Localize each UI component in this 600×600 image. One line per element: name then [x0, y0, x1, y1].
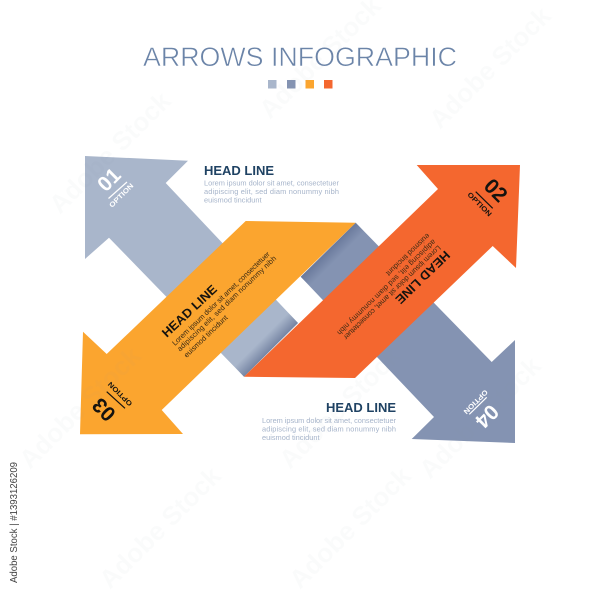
option 03 label: 03	[88, 393, 121, 426]
fold shadow on arrow 01	[222, 300, 298, 377]
arrow 04: dark grey, down-right	[301, 223, 515, 443]
title: ARROWS INFOGRAPHIC	[143, 42, 457, 72]
text block: head line bottom: HEAD LINE	[326, 401, 396, 415]
stock watermark text: Adobe Stock	[13, 340, 147, 474]
text block: head line on orange arrow: HEAD LINE	[393, 248, 453, 307]
text block: head line on yellow arrow: euismod tincidunt	[182, 313, 230, 359]
stock watermark text: Adobe Stock	[273, 340, 407, 474]
text block: head line bottom: euismod tincidunt	[262, 433, 320, 442]
text block: head line on orange arrow: adipiscing elit, sed diam nonummy nibh	[335, 238, 438, 337]
stock watermark text: Adobe Stock	[93, 460, 227, 594]
option 02 label: 02	[479, 174, 512, 207]
stock watermark text: Adobe Stock	[43, 85, 177, 219]
text block: head line bottom: Lorem ipsum dolor sit amet, consectetuer	[262, 416, 397, 425]
text block: head line top: HEAD LINE	[204, 164, 274, 178]
arrow 01: light grey, up-left	[85, 156, 298, 377]
option 01 label: 01	[93, 163, 126, 196]
stock id caption: Adobe Stock | #1393126209	[8, 462, 20, 583]
text block: head line top: adipiscing elit, sed diam nonummy nibh	[204, 187, 339, 196]
option 04 label	[462, 388, 503, 433]
text block: head line on yellow arrow: HEAD LINE	[159, 282, 220, 340]
option 04 label: 04	[470, 400, 503, 433]
text block: head line top: euismod tincidunt	[204, 196, 262, 204]
stock watermark text: Adobe Stock	[283, 460, 417, 594]
text block: head line on orange arrow: euismod tincidunt	[384, 232, 432, 278]
text block: head line on orange arrow: Lorem ipsum dolor sit amet, consectetuer	[341, 244, 443, 342]
fold shadow on arrow 04	[301, 223, 378, 299]
text block: head line bottom: adipiscing elit, sed diam nonummy nibh	[262, 424, 396, 434]
text block: head line bottom	[262, 401, 397, 442]
text block: head line on yellow arrow: Lorem ipsum dolor sit amet, consectetuer	[170, 249, 272, 347]
stock watermark text: Adobe Stock	[413, 350, 547, 484]
option 01 label: OPTION	[108, 183, 135, 209]
text block: head line top: Lorem ipsum dolor sit amet, consectetuer	[204, 178, 340, 188]
text block: head line top	[204, 164, 340, 204]
option 03 label	[88, 380, 134, 426]
arrow 03: yellow, down-left	[80, 221, 356, 434]
option 01 label	[93, 163, 135, 209]
option 02 label: OPTION	[466, 191, 492, 218]
option 04 label: OPTION	[462, 388, 489, 415]
stock watermark text: Adobe Stock	[423, 0, 557, 134]
option 02 label	[466, 174, 512, 218]
option 03 label: OPTION	[107, 380, 134, 407]
color key squares	[268, 80, 332, 88]
arrow 02: orange, up-right	[244, 165, 520, 378]
text block: head line on yellow arrow: adipiscing elit, sed diam nonummy nibh	[175, 254, 278, 353]
